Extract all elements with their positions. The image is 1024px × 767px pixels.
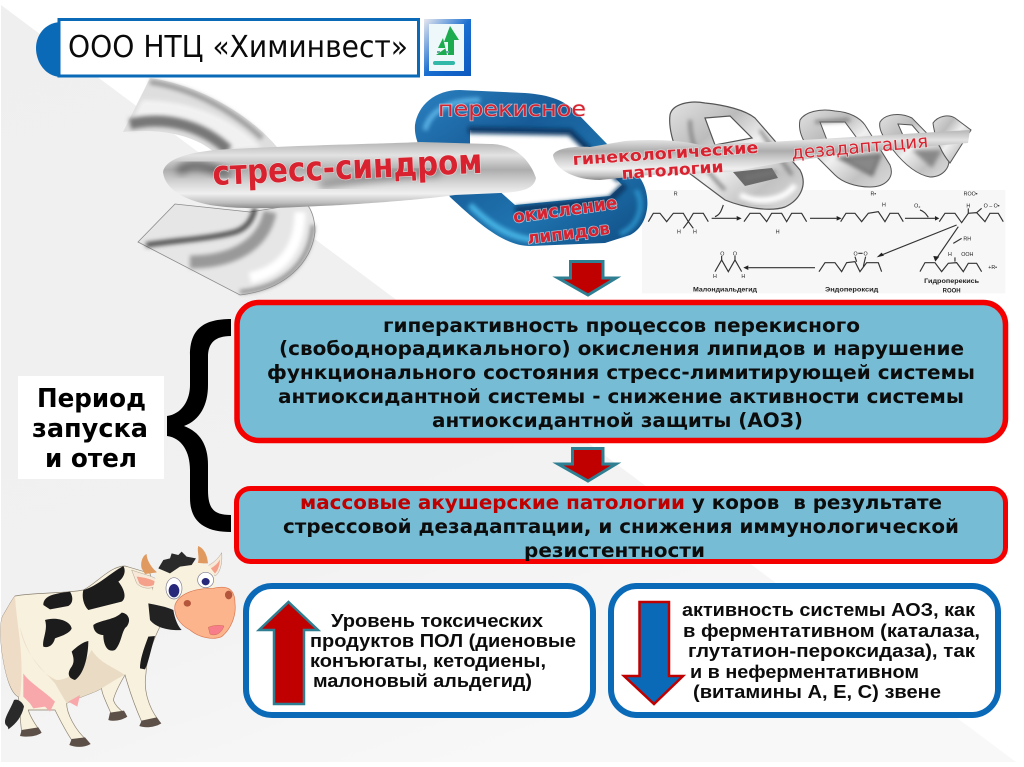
chemistry diagram: lipid peroxidation: O xyxy=(733,251,737,257)
chemistry diagram: lipid peroxidation: H xyxy=(882,203,886,209)
panel: toxic products level xyxy=(246,586,593,715)
chemistry diagram: lipid peroxidation: +R• xyxy=(988,265,997,271)
panel: mass obstetric pathologies: стрессовой дезадаптации, и снижения иммунологической xyxy=(283,515,959,538)
chain label: стресс-синдром: стресс-синдром xyxy=(212,142,483,194)
panel: hyperactivity of peroxidation: функционального состояния стресс-лимитирующей системы xyxy=(267,361,975,384)
header: company title xyxy=(36,20,418,77)
chemistry diagram: lipid peroxidation: R• xyxy=(870,191,876,197)
chain label: окисление: окисление xyxy=(512,193,619,228)
icon: down arrow xyxy=(624,602,683,704)
header blue tab xyxy=(36,22,62,77)
text: antioxidant activity: активность системы АОЗ, как xyxy=(682,599,976,620)
text: antioxidant activity: и в неферментативном xyxy=(690,661,919,682)
icon: up arrow xyxy=(259,602,318,704)
chain illustration xyxy=(123,78,971,295)
chain: fifth steel link xyxy=(933,116,971,163)
brace xyxy=(167,319,231,532)
chemistry diagram: lipid peroxidation: H xyxy=(776,229,780,235)
chain: stress-syndrome link xyxy=(163,142,536,208)
chemistry diagram: lipid peroxidation: O – O• xyxy=(984,203,1000,209)
panel: period label: запуска xyxy=(32,414,148,444)
chain label: гинекологические: гинекологические xyxy=(572,138,759,169)
header box xyxy=(59,20,418,76)
text: toxic products: Уровень токсических xyxy=(331,610,544,631)
chain: third steel link xyxy=(799,110,891,187)
text: antioxidant activity xyxy=(682,599,980,702)
chain: fourth steel link xyxy=(880,115,949,177)
icon: cow xyxy=(1,546,235,747)
panel: hyperactivity of peroxidation: антиоксидантной системы - снижение активности системы xyxy=(278,385,964,408)
header text: ООО НТЦ «Химинвест» xyxy=(68,30,408,65)
text: antioxidant activity: (витамины А, Е, С) звене xyxy=(693,681,941,702)
chain label: перекисное: перекисное xyxy=(438,97,586,121)
cow udder xyxy=(23,673,80,712)
text: toxic products: конъюгаты, кетодиены, xyxy=(310,650,546,671)
chemistry diagram: lipid peroxidation: Эндопероксид xyxy=(825,287,879,293)
cow hooves xyxy=(20,711,161,747)
panel: hyperactivity of peroxidation xyxy=(237,302,1006,440)
chain: steel bar xyxy=(553,130,970,180)
arrow: middle down arrow xyxy=(558,448,616,481)
chemistry diagram: lipid peroxidation: O₂ xyxy=(914,203,920,209)
icon: company logo xyxy=(424,19,471,76)
panel: mass obstetric pathologies: резистентности xyxy=(524,539,705,562)
panel: mass obstetric pathologies xyxy=(236,488,1006,562)
chemistry diagram: lipid peroxidation: Гидроперекись xyxy=(924,279,980,285)
panel: hyperactivity of peroxidation: антиоксидантной защиты (АОЗ) xyxy=(432,409,803,432)
panel: period label: Период xyxy=(37,384,146,414)
chain: first link lower piece xyxy=(138,203,315,295)
chemistry diagram: lipid peroxidation: O xyxy=(720,251,724,257)
cow head xyxy=(141,546,208,574)
chain label: патологии: патологии xyxy=(621,157,724,183)
panel: hyperactivity of peroxidation: (свободнорадикального) окисления липидов и нарушение xyxy=(279,337,964,360)
chemistry diagram: lipid peroxidation: H xyxy=(693,229,697,235)
chemistry diagram: lipid peroxidation: O xyxy=(864,251,868,257)
text: toxic products: малоновый альдегид) xyxy=(313,670,532,691)
chemistry diagram: lipid peroxidation: ROOH xyxy=(943,289,961,295)
chemistry diagram: lipid peroxidation: R xyxy=(674,191,678,197)
chemistry diagram: lipid peroxidation: Малондиальдегид xyxy=(693,287,757,293)
cow tail xyxy=(5,700,24,729)
text: toxic products: продуктов ПОЛ (диеновые xyxy=(310,630,576,651)
chain: blue link xyxy=(415,90,647,246)
chemistry diagram: lipid peroxidation: O xyxy=(854,251,858,257)
chemistry diagram: lipid peroxidation: RH xyxy=(963,237,971,243)
panel: hyperactivity of peroxidation: гиперактивность процессов перекисного xyxy=(383,314,860,337)
chemistry diagram: lipid peroxidation: OOH xyxy=(961,252,974,258)
panel: mass obstetric pathologies: массовые акушерские патологии у коров в результате xyxy=(300,491,942,514)
panel: antioxidant activity xyxy=(611,586,998,715)
chemistry diagram: lipid peroxidation: H xyxy=(966,203,970,209)
chain: second steel link xyxy=(670,102,803,209)
chemistry diagram: lipid peroxidation: H xyxy=(677,229,681,235)
chain label: дезадаптация: дезадаптация xyxy=(791,131,929,164)
chemistry diagram: lipid peroxidation: ROO• xyxy=(964,191,978,197)
panel: period label: и отел xyxy=(45,444,137,474)
cow spots xyxy=(43,566,155,680)
chemistry diagram: lipid peroxidation: H xyxy=(741,274,745,280)
arrow: top down arrow xyxy=(558,262,616,295)
cow body xyxy=(1,566,160,740)
chain: first link upper piece xyxy=(123,78,277,153)
chain label: липидов: липидов xyxy=(526,219,611,249)
text: antioxidant activity: глутатион-пероксидаза), так xyxy=(688,640,976,661)
chemistry diagram: lipid peroxidation xyxy=(642,190,1005,295)
text: antioxidant activity: в ферментативном (каталаза, xyxy=(683,620,980,641)
chemistry diagram: lipid peroxidation: H xyxy=(713,274,717,280)
text: toxic products xyxy=(310,610,576,691)
chemistry diagram: lipid peroxidation: H xyxy=(948,252,952,258)
panel: period label xyxy=(18,376,164,479)
